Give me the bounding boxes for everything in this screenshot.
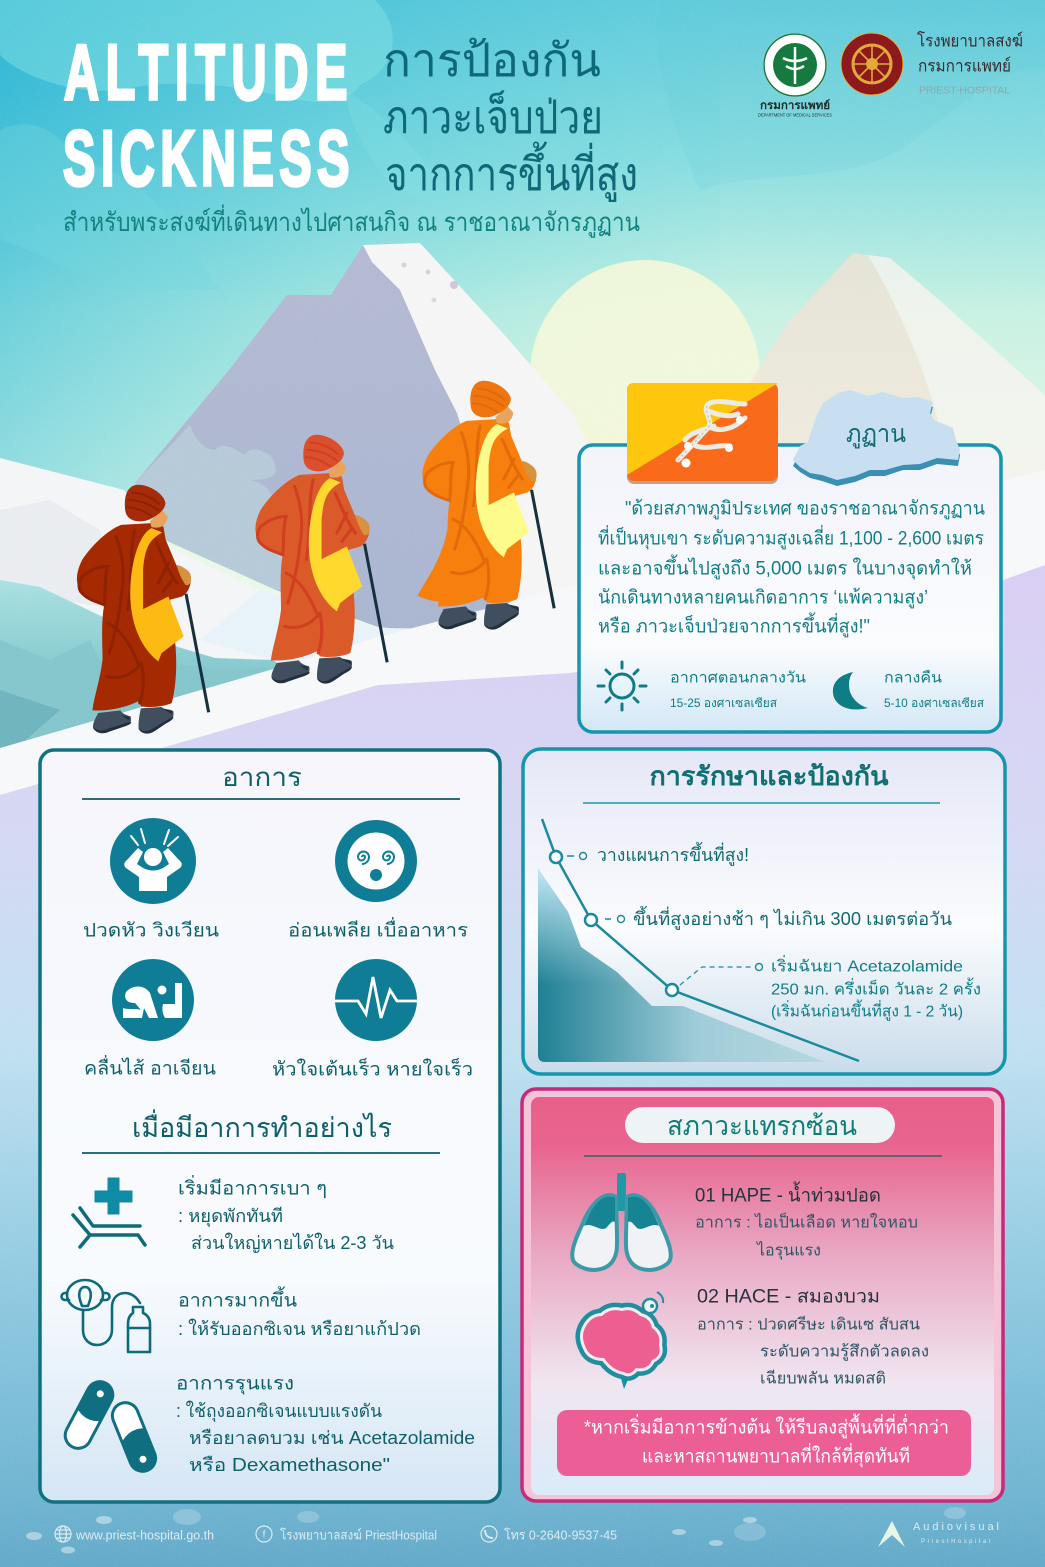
icon: brain bbox=[583, 1292, 663, 1389]
title: Altitude Sickness bbox=[63, 28, 349, 202]
advice: mild: : หยุดพักทันที bbox=[178, 1206, 283, 1227]
monk 3 bbox=[418, 381, 554, 630]
chart: altitude profile bbox=[538, 819, 859, 1062]
icon: lungs bbox=[572, 1173, 671, 1270]
icon: pills bbox=[61, 1377, 160, 1475]
intro paragraph bbox=[598, 498, 985, 638]
footer contacts: www.priest-hospital.go.th bbox=[75, 1528, 214, 1542]
heading: treatment: การรักษาและป้องกัน bbox=[650, 761, 889, 791]
monk 2 bbox=[255, 435, 387, 684]
icon: headache bbox=[110, 818, 196, 904]
logo: audiovisual: PriestHospital bbox=[921, 1539, 990, 1545]
panel: complications bbox=[522, 1089, 1003, 1501]
advice: mild: เริ่มมีอาการเบา ๆ bbox=[178, 1174, 327, 1200]
intro paragraph: นักเดินทางหลายคนเกิดอาการ ‘แพ้ความสูง’ bbox=[598, 588, 928, 608]
panel: treatment and prevention bbox=[523, 749, 1005, 1074]
text: HACE: เฉียบพลัน หมดสติ bbox=[760, 1370, 886, 1388]
footer contacts bbox=[55, 1526, 617, 1542]
map of Bhutan bbox=[793, 390, 960, 486]
lavender ground bbox=[0, 565, 1045, 1567]
label: nausea: คลื่นไส้ อาเจียน bbox=[84, 1054, 216, 1080]
night temperature: กลางคืน bbox=[884, 670, 942, 686]
icon: rest bbox=[73, 1178, 145, 1247]
logo: department of medical services: กรมการแพทย์ bbox=[760, 99, 830, 112]
advice: severe: หรือ Dexamethasone" bbox=[189, 1455, 390, 1475]
advice: severe: : ใช้ถุงออกซิเจนแบบแรงดัน bbox=[176, 1400, 382, 1422]
footer contacts: โรงพยาบาลสงฆ์ PriestHospital bbox=[280, 1528, 437, 1542]
advice: mild bbox=[178, 1174, 394, 1253]
heading pill bbox=[625, 1107, 895, 1143]
logo: department of medical services bbox=[758, 33, 832, 118]
step 2: ขึ้นที่สูงอย่างช้า ๆ ไม่เกิน 300 เมตรต่อวัน bbox=[633, 906, 952, 930]
icon: heart rate bbox=[335, 959, 417, 1041]
footer contacts: โทร 0-2640-9537-45 bbox=[504, 1528, 617, 1542]
advice: mild: ส่วนใหญ่หายได้ใน 2-3 วัน bbox=[191, 1232, 394, 1253]
advice: moderate: : ให้รับออกซิเจน หรือยาแก้ปวด bbox=[178, 1318, 421, 1339]
step 3 bbox=[771, 954, 981, 1022]
advice: severe: อาการรุนแรง bbox=[176, 1374, 294, 1396]
text: HAPE: อาการ : ไอเป็นเลือด หายใจหอบ bbox=[695, 1212, 918, 1232]
text: HACE: อาการ : ปวดศรีษะ เดินเซ สับสน bbox=[697, 1316, 920, 1334]
intro paragraph: และอาจขึ้นไปสูงถึง 5,000 เมตร ในบางจุดทำให้ bbox=[598, 554, 972, 580]
title: Altitude Sickness: SICKNESS bbox=[63, 114, 349, 202]
footer spots bbox=[26, 1507, 966, 1554]
callout: descend warning bbox=[557, 1410, 971, 1476]
title: Altitude Sickness: ALTITUDE bbox=[64, 28, 347, 116]
text: HAPE: ไอรุนแรง bbox=[755, 1240, 821, 1260]
hospital name: PRIEST-HOSPITAL bbox=[919, 86, 1010, 96]
heading: symptoms: อาการ bbox=[222, 762, 302, 792]
hospital name bbox=[917, 30, 1023, 96]
text: HAPE: 01 HAPE - น้ำท่วมปอด bbox=[695, 1182, 881, 1206]
advice: severe: หรือยาลดบวม เช่น Acetazolamide bbox=[189, 1428, 475, 1448]
sun bbox=[530, 260, 760, 490]
step 3: 250 มก. ครึ่งเม็ด วันละ 2 ครั้ง bbox=[771, 978, 981, 998]
icon: vomiting bbox=[112, 959, 194, 1041]
text: HACE: 02 HACE - สมองบวม bbox=[697, 1286, 880, 1308]
advice: severe bbox=[176, 1374, 475, 1475]
snow slope bbox=[0, 470, 1045, 800]
advice: moderate: อาการมากขึ้น bbox=[178, 1286, 297, 1312]
right mountain bbox=[690, 253, 1045, 620]
title: Thai heading: ภาวะเจ็บป่วย bbox=[383, 90, 603, 143]
night temperature: 5-10 องศาเซลเซียส bbox=[884, 696, 985, 710]
daytime temperature: อากาศตอนกลางวัน bbox=[670, 670, 806, 686]
daytime temperature: 15-25 องศาเซลเซียส bbox=[670, 696, 778, 710]
step 1: วางแผนการขึ้นที่สูง! bbox=[597, 842, 749, 866]
icon: facebook bbox=[256, 1526, 272, 1542]
logo: priest hospital bbox=[841, 33, 903, 95]
monk 1 bbox=[77, 485, 209, 734]
left mountain bbox=[135, 243, 630, 640]
monks walking bbox=[77, 381, 554, 734]
label: headache: ปวดหัว วิงเวียน bbox=[83, 920, 219, 942]
text: HAPE bbox=[695, 1182, 918, 1260]
hospital name: กรมการแพทย์ bbox=[918, 56, 1011, 76]
step 3: เริ่มฉันยา Acetazolamide bbox=[771, 954, 963, 976]
intro paragraph: ที่เป็นหุบเขา ระดับความสูงเฉลี่ย 1,100 - 2,600 เมตร bbox=[598, 524, 984, 550]
subtitle: สำหรับพระสงฆ์ที่เดินทางไปศาสนกิจ ณ ราชอาณาจักรภูฏาน bbox=[63, 204, 640, 238]
text: HACE: ระดับความรู้สึกตัวลดลง bbox=[760, 1342, 929, 1362]
title: Thai heading: การป้องกัน bbox=[383, 34, 601, 86]
logo: audiovisual bbox=[878, 1521, 999, 1547]
hospital name: โรงพยาบาลสงฆ์ bbox=[917, 30, 1023, 50]
teal hills bbox=[0, 580, 290, 755]
map of Bhutan: ภูฏาน bbox=[846, 420, 906, 449]
advice: moderate bbox=[178, 1286, 421, 1339]
heading: what to do: เมื่อมีอาการทำอย่างไร bbox=[132, 1109, 392, 1143]
icon: globe bbox=[55, 1526, 71, 1542]
intro paragraph: หรือ ภาวะเจ็บป่วยจากการขึ้นที่สูง!" bbox=[598, 612, 870, 638]
icon: sun bbox=[598, 662, 646, 710]
text: HACE bbox=[697, 1286, 929, 1388]
icon: Bhutan flag bbox=[627, 383, 778, 484]
white hill bbox=[0, 458, 378, 760]
panel: Bhutan intro bbox=[579, 383, 1001, 732]
heading pill: สภาวะแทรกซ้อน bbox=[667, 1111, 857, 1141]
icon: phone bbox=[481, 1526, 497, 1542]
callout: descend warning: *หากเริ่มมีอาการข้างต้น ให้รีบลงสู่พื้นที่ที่ต่ำกว่า bbox=[584, 1414, 949, 1438]
step 3: (เริ่มฉันก่อนขึ้นที่สูง 1 - 2 วัน) bbox=[771, 1000, 963, 1022]
title: Thai heading: จากการขึ้นที่สูง bbox=[385, 141, 638, 202]
title: Thai heading bbox=[383, 34, 638, 202]
icon: dizzy face bbox=[335, 820, 417, 902]
callout: descend warning: และหาสถานพยาบาลที่ใกล้ที่สุดทันที bbox=[642, 1442, 910, 1468]
icon: moon bbox=[833, 672, 868, 710]
label: fatigue: อ่อนเพลีย เบื่ออาหาร bbox=[288, 916, 468, 942]
icon: oxygen mask bbox=[62, 1280, 150, 1352]
night temperature bbox=[884, 670, 985, 710]
icon: facebook: f bbox=[263, 1530, 266, 1540]
panel: symptoms and what to do bbox=[40, 750, 500, 1502]
logo: audiovisual: Audiovisual bbox=[913, 1521, 999, 1533]
logo: department of medical services: DEPARTMENT OF MEDICAL SERVICES bbox=[758, 112, 832, 118]
label: fast heartbeat: หัวใจเต้นเร็ว หายใจเร็ว bbox=[272, 1056, 473, 1080]
intro paragraph: "ด้วยสภาพภูมิประเทศ ของราชอาณาจักรภูฏาน bbox=[625, 498, 985, 520]
daytime temperature bbox=[670, 670, 806, 710]
